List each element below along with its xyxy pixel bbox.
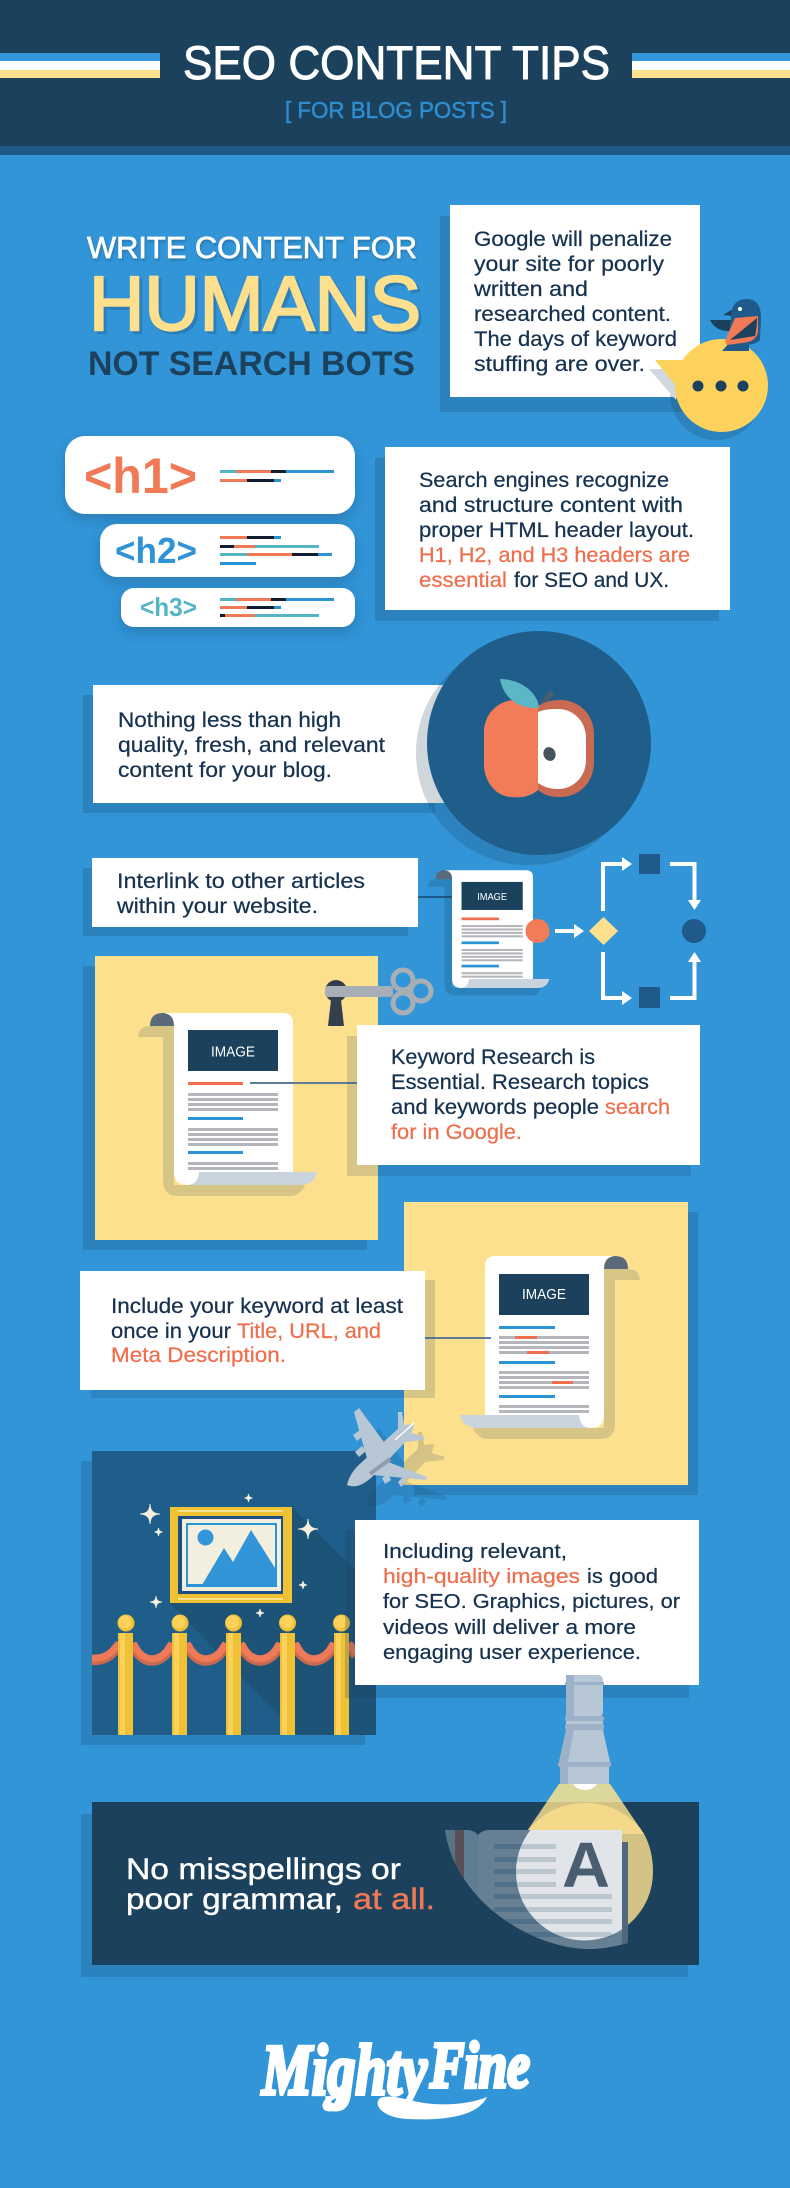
logo: Mighty (261, 2030, 428, 2110)
panel: header layout text: and structure content with (419, 494, 683, 517)
h1 pill (65, 436, 355, 514)
title: SEO CONTENT TIPS (183, 36, 610, 89)
panel: quality content: content for your blog. (118, 759, 332, 782)
icon: flashlight (558, 1675, 611, 1790)
panel: images text: engaging user experience. (383, 1642, 641, 1664)
icon: airplane (347, 1408, 447, 1507)
connector line (418, 896, 454, 898)
light beam (528, 1784, 653, 1925)
left stripes (0, 53, 160, 78)
panel: images text: for SEO. Graphics, pictures, or (383, 1591, 680, 1613)
icon: bird (710, 299, 761, 351)
headline: WRITE CONTENT FOR (87, 230, 417, 265)
panel: title url text: Title, URL, and (237, 1320, 381, 1343)
panel: header layout text: H1, H2, and H3 headers are (419, 544, 690, 567)
panel: interlink (83, 858, 418, 936)
panel: quality content: Nothing less than high (118, 709, 341, 732)
panel: keyword research text: Keyword Research is (391, 1046, 595, 1069)
h2 pill: <h2> (115, 530, 197, 571)
panel: images text: high-quality images (383, 1566, 580, 1588)
panel: html headers (65, 436, 355, 627)
panel: header layout text: for SEO and UX. (514, 569, 669, 592)
h3 pill (121, 588, 355, 627)
panel: no misspellings (81, 1802, 699, 1977)
panel: google penalty: researched content. (474, 303, 671, 326)
panel: interlink: Interlink to other articles (117, 870, 365, 893)
panel: title url text: Include your keyword at least (111, 1295, 403, 1318)
panel: no misspellings: poor grammar, (126, 1883, 343, 1916)
panel: google penalty: stuffing are over. (474, 353, 645, 376)
icon: spotlight and book (440, 1784, 653, 1955)
icon: sparkles (140, 1494, 318, 1617)
right stripes (632, 53, 790, 78)
panel: interlink: within your website. (116, 895, 318, 918)
logo: Fine (429, 2029, 530, 2102)
icon: flowchart (526, 854, 706, 1008)
letter A: A (562, 1829, 610, 1901)
panel: header layout text (375, 447, 730, 621)
panel: keyword research text: Essential. Research topics (391, 1071, 649, 1094)
icon: apple in circle (427, 631, 651, 855)
panel: quality content (83, 685, 444, 813)
panel: title url text (80, 1271, 435, 1398)
subtitle: [ FOR BLOG POSTS ] (285, 97, 507, 123)
icon: small document: IMAGE (477, 892, 507, 903)
panel: gallery illustration (81, 1451, 376, 1745)
panel: no misspellings: No misspellings or (126, 1853, 401, 1886)
icon: speech bubble (649, 339, 768, 440)
h3 pill: <h3> (140, 592, 197, 622)
icon: small document (428, 870, 549, 995)
book dim (445, 1830, 628, 1949)
panel: header layout text: Search engines recognize (419, 469, 669, 492)
circle shadow (416, 641, 640, 865)
headline (87, 230, 421, 383)
panel: title url text: Meta Description. (111, 1344, 286, 1367)
rope (92, 1643, 356, 1661)
icon: document B (460, 1256, 640, 1439)
panel: keyword research yellow card (83, 956, 378, 1250)
h2 pill (100, 524, 355, 577)
panel: keyword research text: and keywords people (391, 1096, 599, 1119)
panel: title url yellow card (404, 1202, 698, 1495)
headline: NOT SEARCH BOTS (88, 345, 415, 383)
panel: keyword research text (347, 1025, 700, 1176)
icon: key and keyhole (325, 970, 431, 1026)
panel: header layout text: proper HTML header layout. (419, 519, 694, 542)
icon: picture frame (170, 1507, 292, 1603)
panel: keyword research text: search (605, 1096, 670, 1119)
header band (0, 0, 790, 155)
panel: quality content: quality, fresh, and relevant (118, 734, 385, 757)
panel: images text: Including relevant, (383, 1541, 567, 1563)
panel: google penalty: The days of keyword (474, 328, 677, 351)
panel: title url text: once in your (111, 1320, 231, 1343)
panel: keyword research text: for in Google. (391, 1121, 522, 1144)
h1 pill: <h1> (84, 448, 197, 504)
panel: google penalty: written and (473, 278, 588, 301)
posts (118, 1614, 350, 1735)
panel: google penalty: Google will penalize (474, 228, 672, 251)
headline: HUMANS (89, 261, 421, 347)
panel: images text: videos will deliver a more (383, 1617, 636, 1639)
icon: document B: IMAGE (522, 1286, 566, 1303)
panel: google penalty (440, 205, 700, 412)
panel: header layout text: essential (419, 569, 507, 592)
panel: images text: is good (587, 1566, 658, 1588)
icon: document A: IMAGE (211, 1044, 255, 1061)
panel: images text (345, 1520, 699, 1698)
book lit (516, 1830, 622, 1940)
logo (261, 2029, 530, 2119)
panel: no misspellings: at all. (353, 1883, 435, 1916)
icon: document A (138, 1013, 317, 1196)
panel: google penalty: your site for poorly (474, 253, 665, 276)
